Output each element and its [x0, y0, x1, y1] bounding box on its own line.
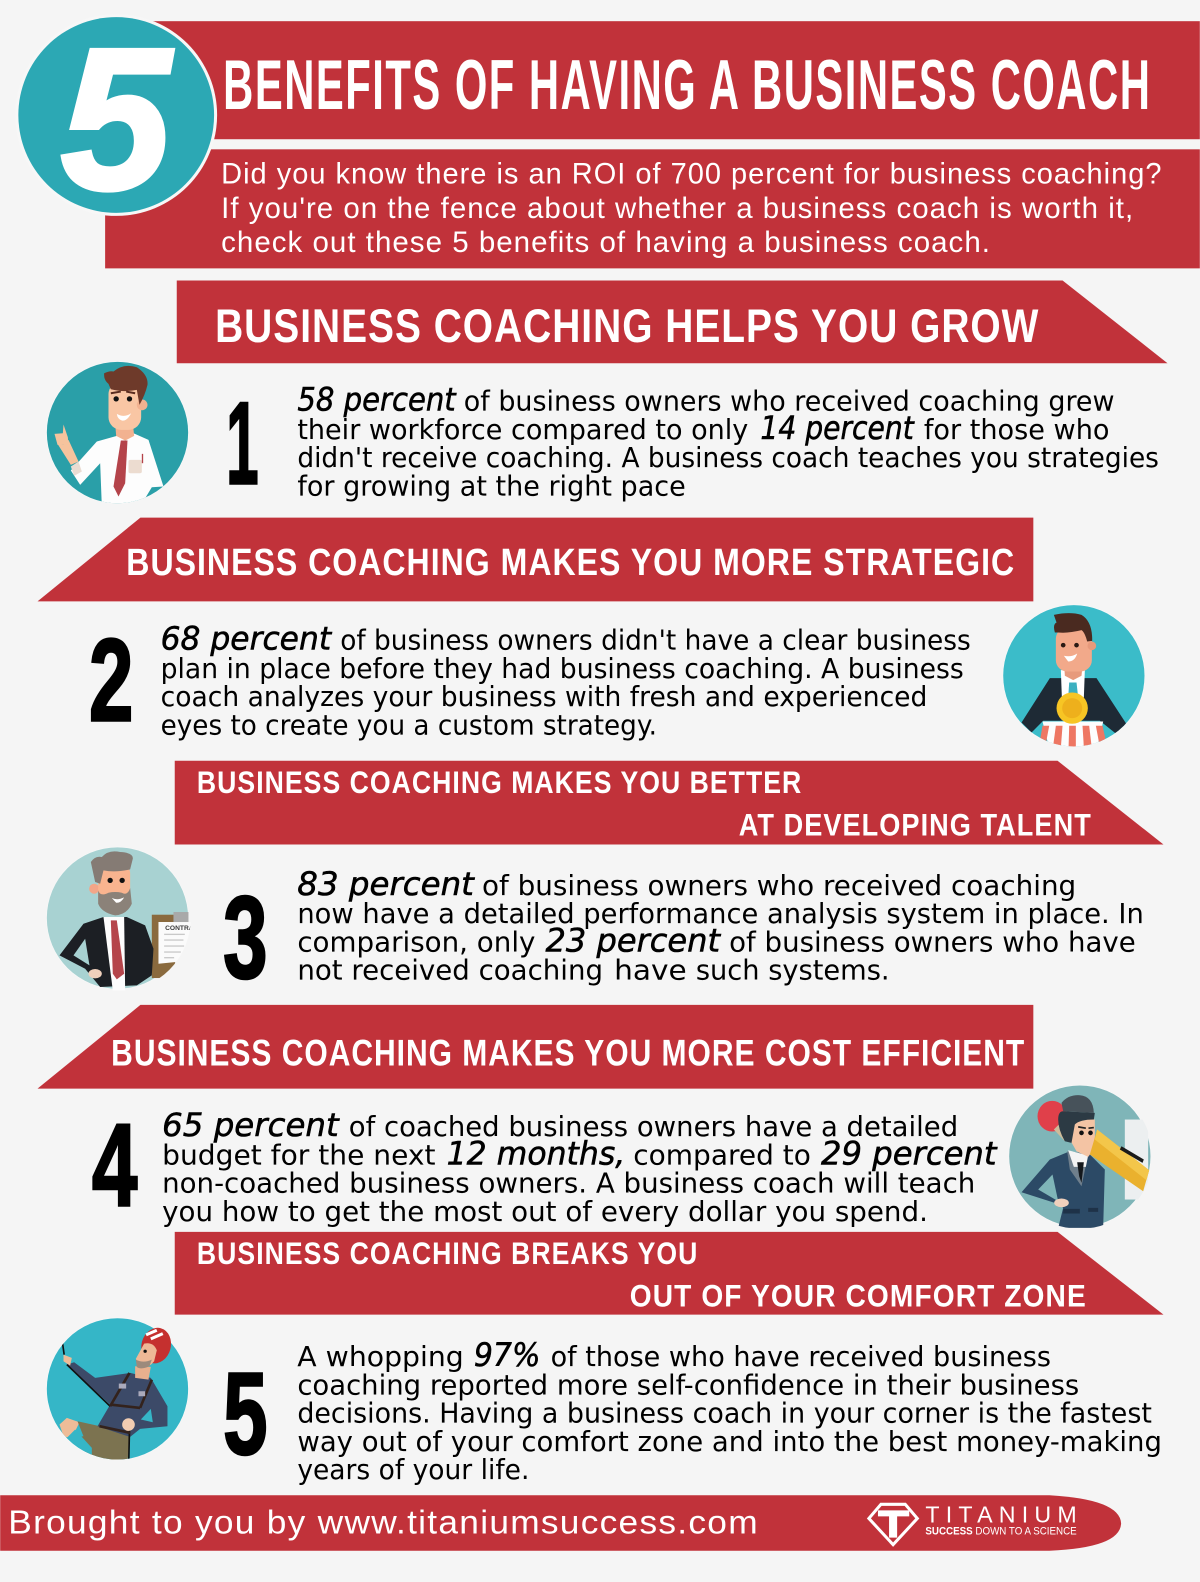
section 4 text: of coached business owners have a detailed — [349, 1110, 958, 1143]
section 4 text: 65 percent — [162, 1108, 340, 1144]
section 2 banner: BUSINESS COACHING MAKES YOU MORE STRATEGIC — [126, 541, 1015, 584]
section 1 text: didn't receive coaching. A business coach teaches you strategies — [297, 441, 1159, 474]
section 4 text: 29 percent — [821, 1136, 998, 1172]
section 3 text: comparison, only — [297, 925, 535, 958]
badge: number 5 — [15, 6, 217, 232]
avatar 1: thumbs up businessman — [46, 361, 189, 507]
section 1 text: 14 percent — [760, 411, 915, 447]
section 1 banner: BUSINESS COACHING HELPS YOU GROW — [215, 300, 1039, 353]
section 2 text — [161, 622, 971, 742]
section 4 text: compared to — [633, 1138, 811, 1171]
section 3 banner — [175, 761, 1163, 844]
section 4 banner — [38, 1005, 1033, 1089]
badge: number 5: 5 — [61, 6, 173, 232]
section 1 text: 58 percent — [297, 383, 457, 419]
section 2 text: plan in place before they had business coaching. A business — [161, 652, 964, 685]
logo: Titanium: SUCCESS DOWN TO A SCIENCE — [925, 1526, 1077, 1538]
section 5 text: decisions. Having a business coach in your corner is the fastest — [297, 1397, 1152, 1430]
section 5 text: 97% — [474, 1338, 540, 1374]
section 5 text: way out of your comfort zone and into the best money-making — [297, 1425, 1162, 1458]
section 5 text: years of your life. — [297, 1453, 529, 1486]
section 3 banner: BUSINESS COACHING MAKES YOU BETTER — [197, 765, 802, 800]
intro banner — [105, 149, 1200, 268]
avatar 3: bearded businessman with contract: CONTRA — [165, 925, 194, 932]
section 5 text: of those who have received business — [551, 1340, 1051, 1373]
intro text — [221, 159, 1162, 259]
footer band — [0, 1495, 1121, 1551]
section 4 text: you how to get the most out of every dollar you spend. — [162, 1195, 928, 1228]
section 2 text: of business owners didn't have a clear business — [340, 624, 971, 657]
section 1 text: for those who — [924, 413, 1110, 446]
title banner — [152, 21, 1200, 139]
section 5 text — [297, 1338, 1162, 1486]
section 5 text: coaching reported more self-confidence in their business — [297, 1368, 1079, 1401]
section 3 text: have — [614, 954, 687, 987]
section 4 text: 12 months, — [447, 1136, 625, 1172]
section 3 text: such systems. — [696, 954, 890, 987]
logo: Titanium: TITANIUM — [925, 1501, 1077, 1527]
section 3 text: not received coaching — [297, 954, 603, 987]
section 5 banner: OUT OF YOUR COMFORT ZONE — [630, 1279, 1087, 1314]
number 5: 5 — [223, 1348, 268, 1479]
number 4: 4 — [92, 1100, 137, 1231]
section 3 text: 83 percent — [297, 867, 475, 903]
avatar 2: businessman with coin — [1003, 604, 1145, 751]
section 3 text: of business owners who have — [729, 925, 1136, 958]
section 4 text: non-coached business owners. A business coach will teach — [162, 1167, 975, 1200]
section 5 banner: BUSINESS COACHING BREAKS YOU — [197, 1236, 698, 1271]
section 3 banner: AT DEVELOPING TALENT — [739, 807, 1092, 842]
header — [15, 6, 1200, 268]
footer text: Brought to you by www.titaniumsuccess.com — [8, 1505, 759, 1542]
number 2: 2 — [89, 614, 133, 745]
section 2 text: coach analyzes your business with fresh and experienced — [161, 680, 927, 713]
section 1 banner — [177, 280, 1168, 363]
section 1 text: their workforce compared to only — [297, 413, 748, 446]
avatar 4: businessman carrying pencil — [1009, 1085, 1151, 1228]
logo: Titanium — [869, 1501, 1077, 1545]
section 5 text: A whopping — [297, 1340, 464, 1373]
intro text: If you're on the fence about whether a business coach is worth it, — [221, 193, 1134, 225]
avatar 3: bearded businessman with contract — [46, 847, 194, 990]
section 3 text: 23 percent — [546, 923, 722, 959]
section 1 text: for growing at the right pace — [297, 469, 686, 502]
section 5 banner — [175, 1232, 1163, 1315]
section 2 text: 68 percent — [161, 622, 333, 658]
section 2 banner — [38, 518, 1033, 601]
intro text: check out these 5 benefits of having a business coach. — [221, 227, 991, 259]
section 4 text: budget for the next — [162, 1138, 436, 1171]
section 1 text: of business owners who received coaching grew — [464, 385, 1115, 418]
text: 1 — [226, 377, 258, 508]
avatar 5: climber — [46, 1318, 189, 1461]
section 2 text: eyes to create you a custom strategy. — [161, 709, 657, 742]
section 3 text — [297, 867, 1144, 987]
intro text: Did you know there is an ROI of 700 percent for business coaching? — [221, 159, 1162, 191]
section 1 text — [297, 383, 1159, 502]
section 3 text: of business owners who received coaching — [482, 869, 1076, 902]
number 3: 3 — [223, 872, 268, 1003]
section 3 text: now have a detailed performance analysis system in place. In — [297, 897, 1144, 930]
section 4 text — [162, 1108, 998, 1228]
